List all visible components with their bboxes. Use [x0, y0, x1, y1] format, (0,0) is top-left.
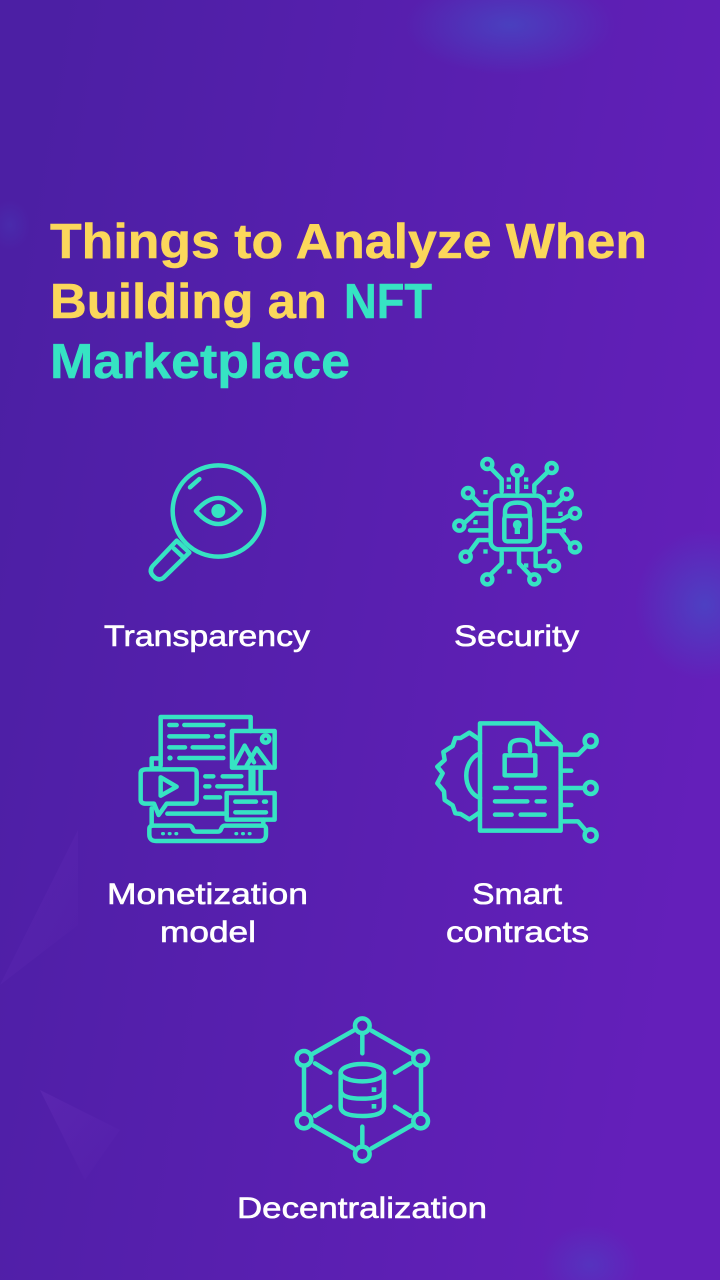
label line: Smart: Smart: [472, 878, 563, 911]
icon: decentralized database: [297, 1018, 428, 1161]
label line: contracts: contracts: [446, 916, 589, 949]
title line 1: Things to Analyze When: [50, 215, 647, 269]
label: Security: Security: [454, 620, 579, 653]
label line: Monetization: Monetization: [107, 878, 308, 911]
title line 3: Marketplace: [50, 335, 350, 389]
icon: circuit lock: [454, 459, 580, 584]
label: Decentralization: Decentralization: [237, 1192, 487, 1225]
icon: magnifier with eye: [151, 465, 264, 579]
label line: model: model: [160, 916, 256, 949]
title NFT: NFT: [344, 275, 432, 329]
icon: monetization media: [141, 717, 275, 841]
title line 2: Building an: [50, 275, 327, 329]
icon: smart contract: [437, 723, 597, 841]
label: Smart contracts: [446, 878, 589, 949]
title: [50, 215, 647, 389]
label: Transparency: Transparency: [104, 620, 310, 653]
label: Monetization model: [107, 878, 308, 949]
